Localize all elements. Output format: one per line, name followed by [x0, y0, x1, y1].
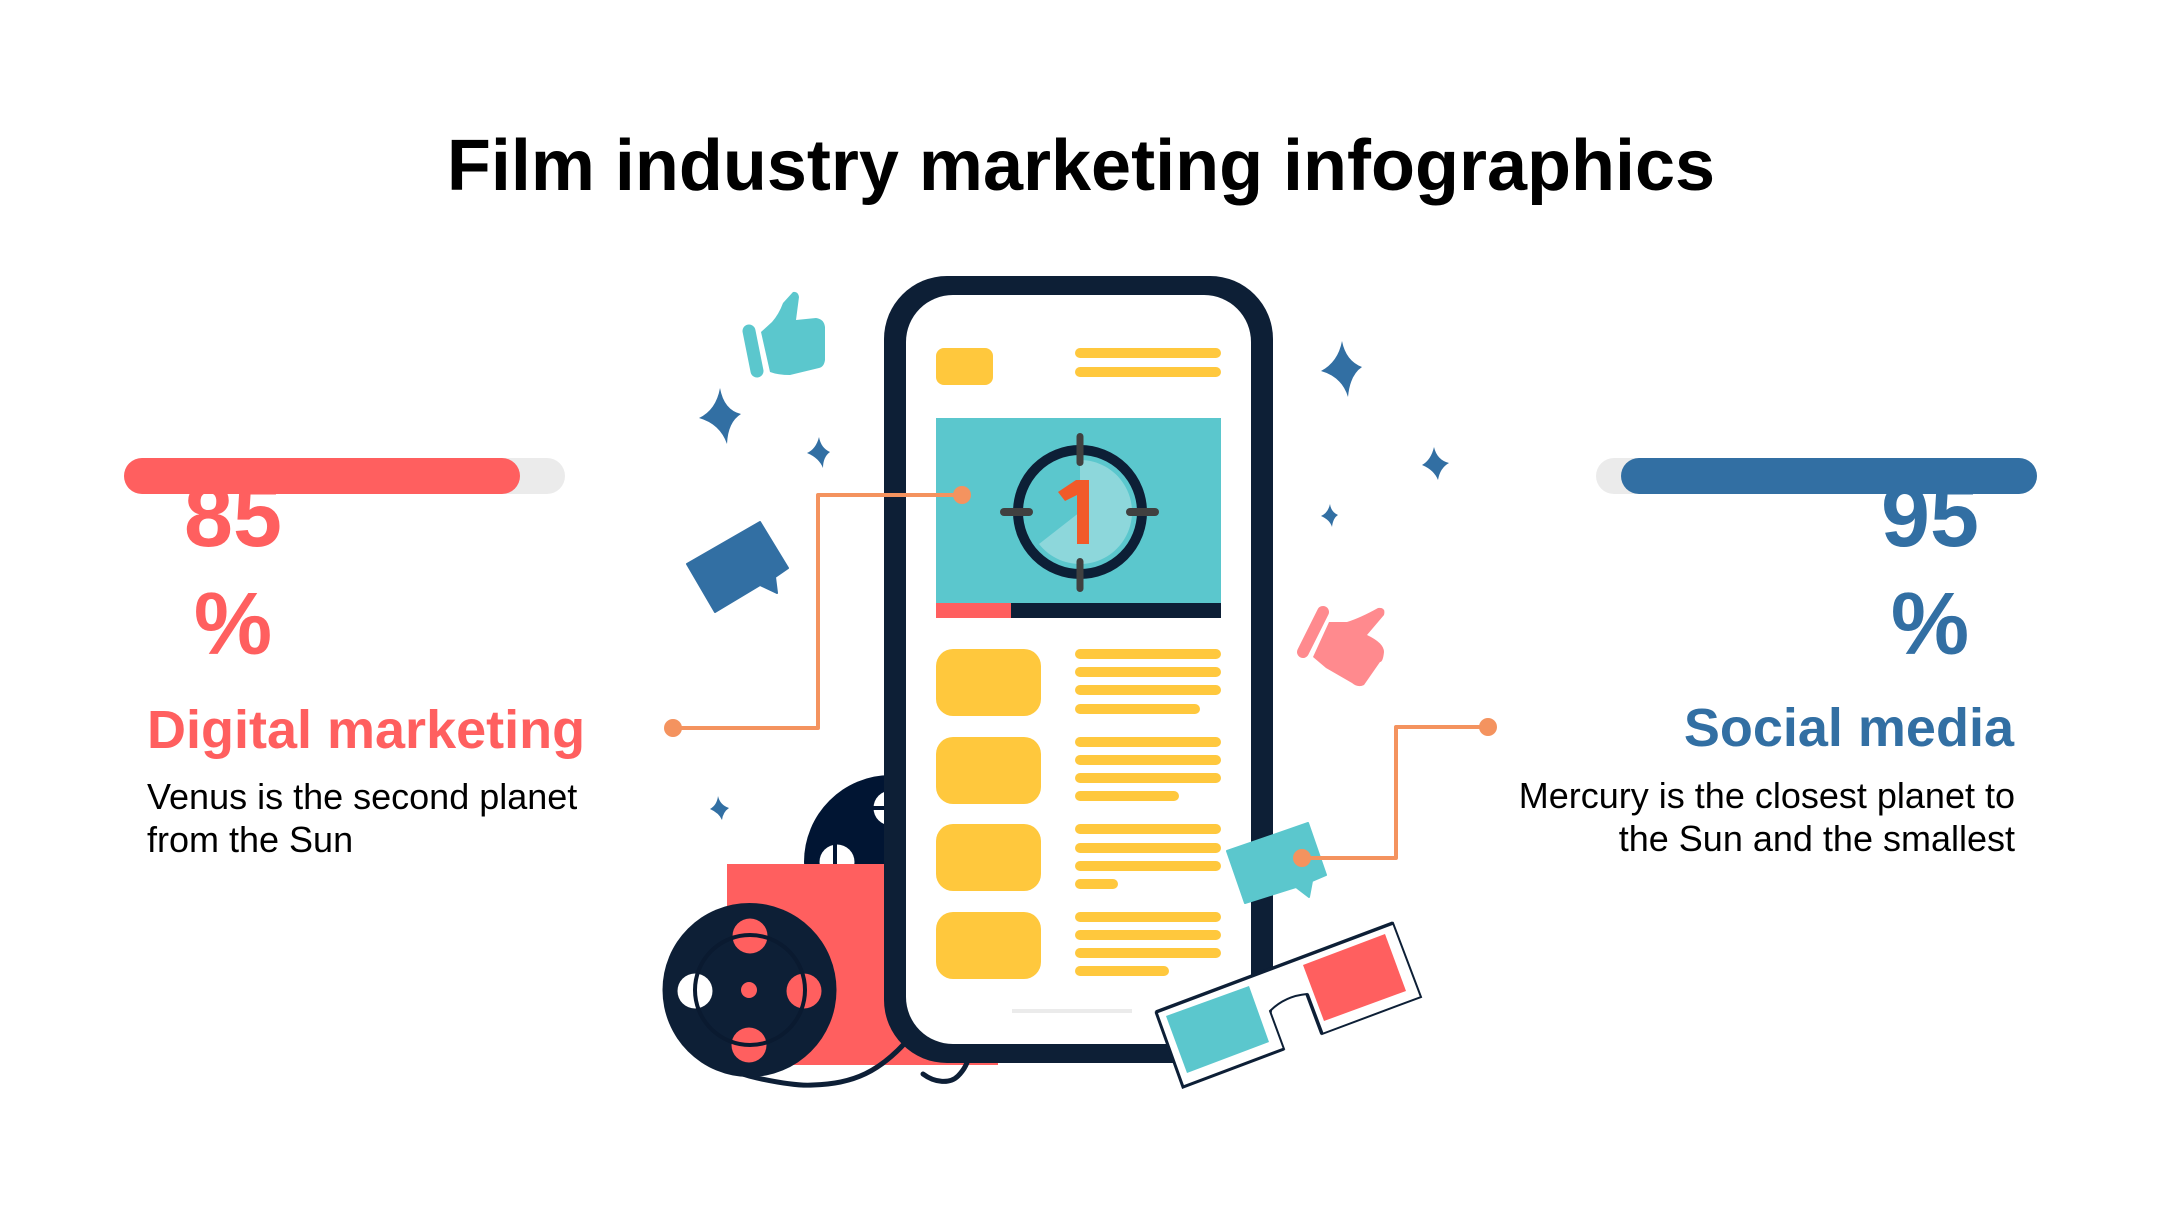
description: mercury: the Sun and the smallest — [1619, 818, 2015, 859]
list row 3 — [936, 824, 1221, 891]
list row 2 — [936, 737, 1221, 804]
red shopping bag — [727, 864, 998, 1065]
film strip tail — [700, 1043, 905, 1085]
stat: 95 percent: 95 — [1881, 466, 1979, 565]
icon: sparkle stars — [699, 341, 1449, 820]
stat: 85 percent: % — [194, 574, 272, 673]
back film reel — [804, 775, 978, 949]
video progress bar — [936, 603, 1221, 618]
phone frame — [884, 276, 1273, 1063]
description: mercury: Mercury is the closest planet to — [1519, 775, 2015, 816]
heading: social media: Social media — [1684, 698, 2015, 758]
phone screen — [906, 295, 1251, 1044]
description: venus: from the Sun — [147, 819, 353, 860]
front film reel — [662, 903, 836, 1077]
stat: 95 percent: % — [1891, 574, 1969, 673]
stat: 85 percent: 85 — [184, 466, 282, 565]
heading: digital marketing: Digital marketing — [147, 700, 585, 760]
header thumbnail — [936, 348, 993, 385]
connector: digital marketing — [664, 486, 971, 737]
icon: teal speech bubble — [1227, 823, 1326, 903]
header text lines — [1075, 348, 1221, 377]
icon: 3d glasses — [1156, 923, 1421, 1087]
connector: social media — [1293, 718, 1497, 867]
progress bar: 85 percent — [124, 458, 565, 494]
title: Film industry marketing infographics — [447, 126, 1715, 206]
description: venus: Venus is the second planet — [147, 776, 577, 817]
icon: thumbs up — [749, 292, 825, 375]
panel: digital marketing — [124, 458, 585, 860]
icon: blue speech bubble — [687, 522, 788, 612]
video player — [936, 418, 1221, 618]
countdown dial — [1000, 433, 1159, 592]
list row 1 — [936, 649, 1221, 716]
panel: social media — [1519, 458, 2037, 859]
film strip curl — [923, 1055, 969, 1081]
home indicator — [1012, 1009, 1132, 1013]
phone — [884, 276, 1273, 1063]
list row 4 — [936, 912, 1221, 979]
icon: thumbs down — [1303, 608, 1384, 686]
progress bar: 95 percent — [1596, 458, 2037, 494]
